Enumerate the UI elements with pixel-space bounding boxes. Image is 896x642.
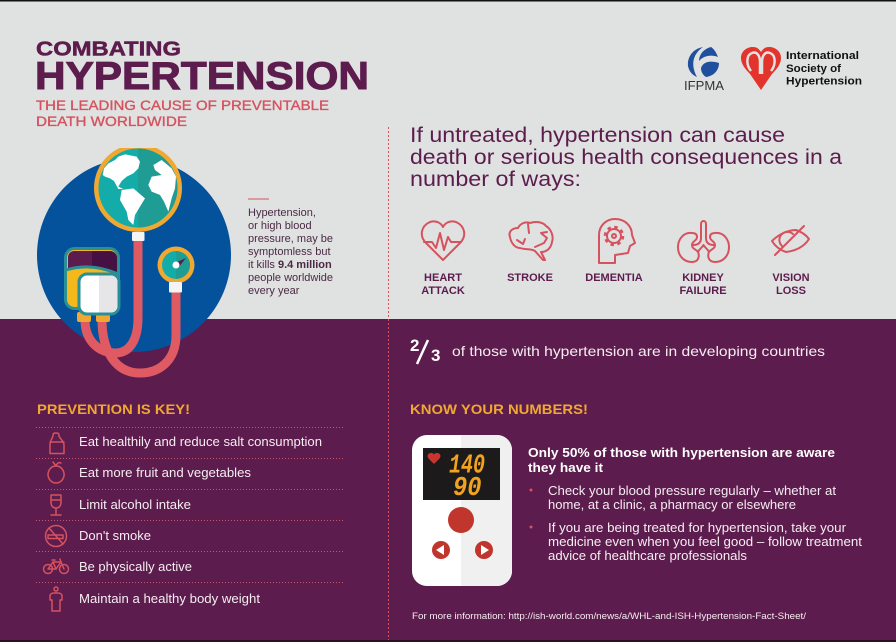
bullet: take medicine: advice of healthcare professionals xyxy=(548,549,747,563)
logo: International Society of Hypertension: Society of xyxy=(786,63,841,75)
icon: vision loss: VISION xyxy=(772,272,810,284)
icon: vision loss: LOSS xyxy=(776,285,806,297)
icon: fruit xyxy=(48,462,64,483)
intro text: symptomless: it kills 9.4 million xyxy=(248,259,332,271)
icon: vision loss xyxy=(772,226,810,297)
heading: prevention: PREVENTION IS KEY! xyxy=(37,401,190,417)
subtitle xyxy=(36,97,329,129)
icon: stroke brain: STROKE xyxy=(507,272,553,284)
globe stem xyxy=(132,232,144,241)
heading: consequences xyxy=(410,123,842,191)
intro text: symptomless: or high blood xyxy=(248,220,312,232)
heading: know your numbers: KNOW YOUR NUMBERS! xyxy=(410,401,588,417)
icon: wine glass xyxy=(51,495,61,515)
item: salt: Eat healthily and reduce salt consumption xyxy=(79,434,322,449)
heading: consequences: death or serious health consequences in a xyxy=(410,145,842,169)
bullet: check regularly xyxy=(530,484,837,512)
gauge xyxy=(158,246,194,292)
item: weight: Maintain a healthy body weight xyxy=(79,591,260,606)
cuff xyxy=(66,248,119,314)
icon: heart attack: ATTACK xyxy=(421,285,465,297)
statistic: two thirds: 3 xyxy=(431,346,440,365)
bullet: take medicine: If you are being treated for hypertension, take your xyxy=(548,521,846,535)
monitor buttons xyxy=(448,507,474,533)
icon: kidney failure: FAILURE xyxy=(679,285,727,297)
icon: kidney failure: KIDNEY xyxy=(682,272,724,284)
connectors xyxy=(77,312,91,322)
statistic: two thirds: 2 xyxy=(410,336,419,355)
logo: International Society of Hypertension: Hypertension xyxy=(786,76,862,88)
tubes xyxy=(85,240,176,373)
globe xyxy=(94,144,182,232)
intro text: symptomless xyxy=(248,198,333,297)
awareness statement: Only 50% of those with hypertension are aware xyxy=(528,445,835,460)
awareness statement xyxy=(528,445,835,475)
item: smoke: Don't smoke xyxy=(79,528,151,543)
item: active: Be physically active xyxy=(79,559,192,574)
logo: IFPMA xyxy=(684,47,725,93)
bullet: check regularly: home, at a clinic, a pharmacy or elsewhere xyxy=(548,498,796,512)
heading: consequences: number of ways: xyxy=(410,167,581,191)
icon: dementia head: DEMENTIA xyxy=(585,272,643,284)
subtitle: DEATH WORLDWIDE xyxy=(36,113,187,129)
icon: heart attack: HEART xyxy=(424,272,462,284)
intro text: symptomless: symptomless but xyxy=(248,246,331,258)
intro text: symptomless: Hypertension, xyxy=(248,207,316,219)
intro text: symptomless: people worldwide xyxy=(248,272,333,284)
subtitle: THE LEADING CAUSE OF PREVENTABLE xyxy=(36,97,329,113)
icon: stroke brain xyxy=(507,222,553,284)
monitor reading xyxy=(449,451,485,503)
title: HYPERTENSION xyxy=(35,55,369,98)
panel: prevention list xyxy=(36,428,343,611)
icon: heart attack xyxy=(421,221,465,297)
logo: IFPMA: IFPMA xyxy=(684,79,725,93)
icon: person xyxy=(50,587,62,611)
intro text: symptomless: every year xyxy=(248,285,300,297)
blood pressure monitor xyxy=(412,435,512,586)
panel: bottom purple background xyxy=(0,319,896,642)
awareness statement: they have it xyxy=(528,460,604,475)
title xyxy=(35,38,369,98)
icon: bicycle xyxy=(44,559,68,574)
icon: no smoking xyxy=(46,526,66,546)
icon: salt shaker xyxy=(50,433,64,454)
icon: kidney failure xyxy=(678,221,729,297)
heading: consequences: If untreated, hypertension can cause xyxy=(410,123,785,147)
blue circle xyxy=(37,158,231,352)
logo: International Society of Hypertension xyxy=(741,47,862,90)
monitor screen xyxy=(423,448,500,500)
monitor reading: 140 xyxy=(449,451,485,482)
icon: dementia head xyxy=(585,219,643,284)
logo: International Society of Hypertension: International xyxy=(786,50,859,62)
footer: more information: For more information: http://ish-world.com/news/a/WHL-and-ISH-Hypertension-Fact-Sheet/ xyxy=(412,611,806,622)
statistic: two thirds: of those with hypertension are in developing countries xyxy=(452,343,825,359)
bullet: take medicine xyxy=(530,521,863,563)
monitor reading: 90 xyxy=(453,473,482,503)
bullet: check regularly: Check your blood pressure regularly – whether at xyxy=(548,484,837,498)
item: fruit: Eat more fruit and vegetables xyxy=(79,465,251,480)
item: alcohol: Limit alcohol intake xyxy=(79,497,191,512)
statistic: two thirds xyxy=(410,336,825,365)
illustration: stethoscope and globe xyxy=(37,144,231,373)
panel: top grey background xyxy=(0,0,896,319)
bullet: take medicine: medicine even when you feel good – follow treatment xyxy=(548,535,863,549)
intro text: symptomless: pressure, may be xyxy=(248,233,333,245)
title: COMBATING xyxy=(36,38,181,60)
